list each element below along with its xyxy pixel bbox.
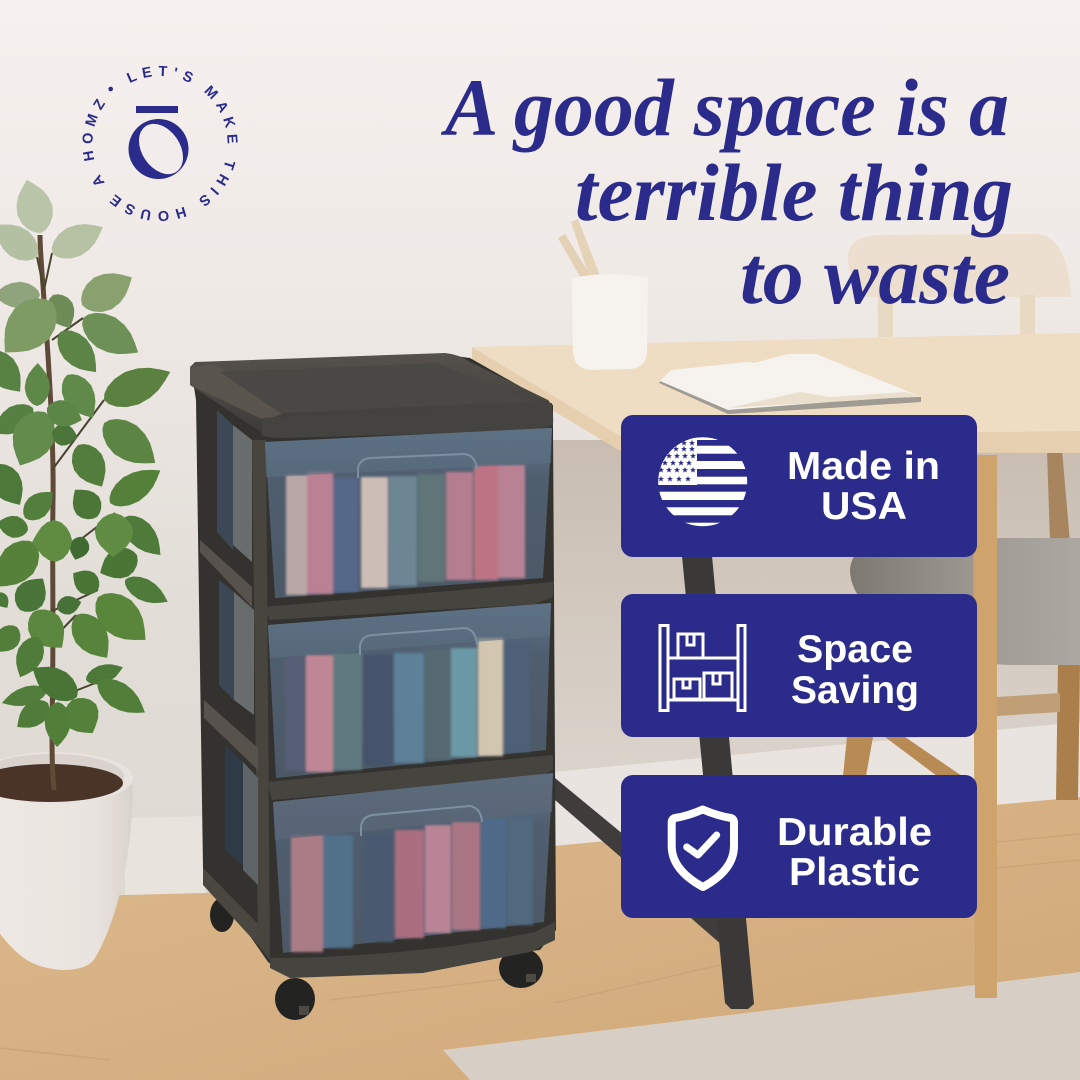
desk — [472, 333, 1080, 1009]
label — [777, 811, 932, 894]
frame — [191, 354, 556, 978]
open book — [659, 354, 921, 414]
top lid — [190, 353, 553, 438]
label: Saving — [791, 669, 919, 712]
storage cart — [190, 353, 556, 1020]
badge: space saving — [621, 594, 977, 737]
pot — [0, 752, 133, 970]
chair — [843, 234, 1080, 800]
label: USA — [821, 485, 907, 528]
badge: made in usa — [621, 415, 977, 557]
label — [787, 445, 940, 528]
label: Made in — [787, 445, 940, 488]
badge: durable plastic — [621, 775, 977, 918]
icon: us flag — [658, 437, 748, 527]
wheels — [210, 898, 543, 1020]
rails — [263, 582, 553, 620]
drawer 1 — [265, 428, 552, 598]
label — [791, 628, 919, 712]
drawer 3 — [273, 773, 553, 953]
icon: shelf with boxes — [660, 626, 745, 710]
label: Plastic — [789, 851, 920, 894]
plant — [0, 175, 177, 970]
branches — [37, 253, 115, 700]
drawer 2 — [268, 603, 551, 778]
side panels — [200, 410, 258, 945]
headline: A good space is a — [440, 62, 1009, 153]
headline: terrible thing — [575, 147, 1013, 238]
logo — [82, 66, 238, 222]
stem — [40, 235, 54, 790]
rug — [443, 972, 1080, 1080]
logo mark — [128, 106, 192, 182]
cup with pencils — [558, 219, 648, 370]
icon: shield with check — [672, 810, 734, 887]
headline: to waste — [740, 230, 1010, 321]
leaves — [0, 175, 177, 747]
circular tagline: LET'S MAKE THIS HOUSE A HOMZ — [82, 66, 238, 222]
headline — [440, 62, 1013, 321]
label: Durable — [777, 811, 932, 854]
label: Space — [797, 628, 913, 671]
